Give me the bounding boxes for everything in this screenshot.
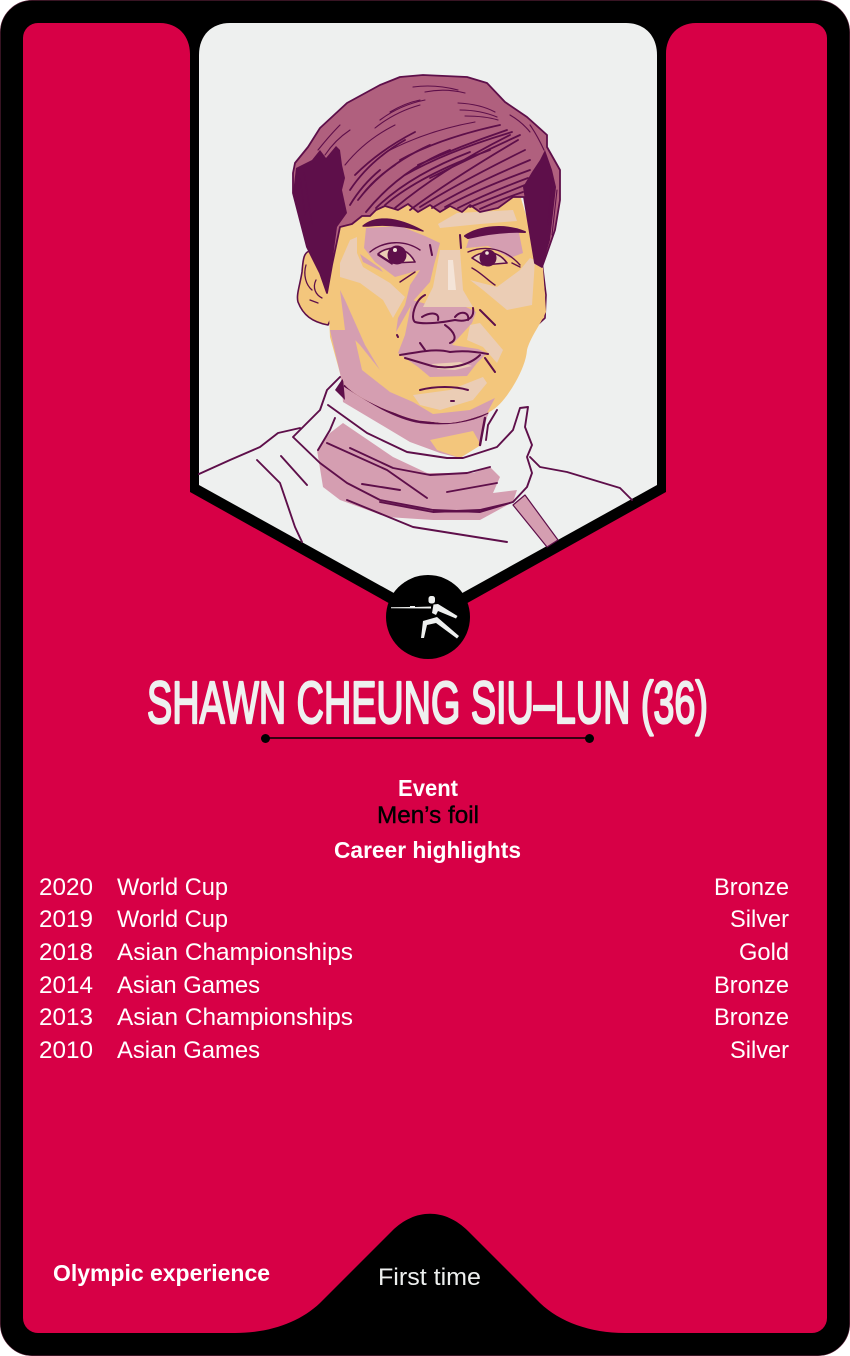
row 2020: Bronze <box>714 874 789 901</box>
row 2019: World Cup <box>117 906 228 933</box>
row 2014: 2014 <box>39 972 93 999</box>
jacket lines <box>199 377 632 542</box>
event label: Event <box>398 775 458 801</box>
row 2013: Asian Championships <box>117 1004 353 1031</box>
face shadows <box>330 226 523 423</box>
row 2019: Silver <box>730 906 789 933</box>
portrait illustration <box>199 75 632 547</box>
row 2014 <box>39 972 789 999</box>
row 2019 <box>39 906 789 933</box>
strap <box>513 495 558 547</box>
row 2018 <box>39 939 789 966</box>
career highlights heading: Career highlights <box>334 837 521 863</box>
row 2014: Asian Games <box>117 972 260 999</box>
jacket collar <box>293 377 532 512</box>
right eyebrow <box>465 227 525 238</box>
row 2013 <box>39 1004 789 1031</box>
row 2018: Asian Championships <box>117 939 353 966</box>
row 2010: Silver <box>730 1037 789 1064</box>
career highlights table <box>39 874 789 1064</box>
row 2018: 2018 <box>39 939 93 966</box>
portrait panel <box>199 23 657 612</box>
ears <box>297 251 546 330</box>
olympic experience label: Olympic experience <box>53 1260 270 1286</box>
hair shadow right <box>523 150 556 267</box>
face skin <box>328 195 546 423</box>
bottom tab <box>235 1214 625 1333</box>
name divider <box>261 734 594 743</box>
row 2010 <box>39 1037 789 1064</box>
hair strands <box>350 125 530 212</box>
sport badge <box>386 575 470 659</box>
row 2014: Bronze <box>714 972 789 999</box>
row 2020: World Cup <box>117 874 228 901</box>
row 2020: 2020 <box>39 874 93 901</box>
hair shadow left <box>293 146 347 293</box>
left eyebrow <box>363 219 423 231</box>
row 2010: Asian Games <box>117 1037 260 1064</box>
row 2013: Bronze <box>714 1004 789 1031</box>
neck <box>335 372 495 458</box>
right eye <box>468 248 520 285</box>
nose and mouth lines <box>397 235 495 401</box>
hair fine strands <box>300 86 557 235</box>
event value: Men’s foil <box>377 802 479 829</box>
row 2010: 2010 <box>39 1037 93 1064</box>
left eye <box>370 243 420 282</box>
row 2018: Gold <box>739 939 789 966</box>
collar shading <box>317 423 517 520</box>
row 2013: 2013 <box>39 1004 93 1031</box>
hair <box>293 75 560 293</box>
icon: fencer <box>391 596 459 638</box>
face highlights <box>340 210 535 410</box>
olympic experience value: First time <box>378 1264 481 1291</box>
row 2020 <box>39 874 789 901</box>
row 2019: 2019 <box>39 906 93 933</box>
portrait frame <box>160 23 696 625</box>
